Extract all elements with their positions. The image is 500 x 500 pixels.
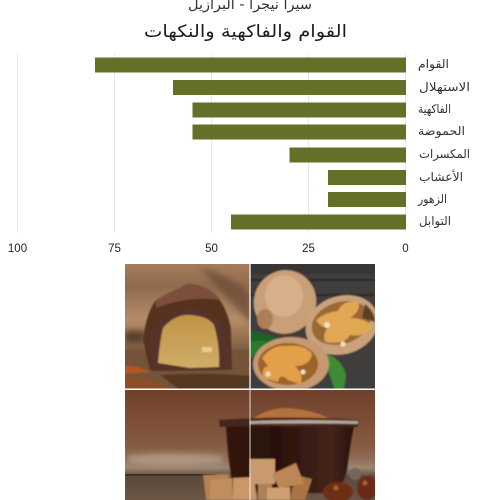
axis tick labels: 0 <box>402 243 409 255</box>
bar: fruit 55 <box>192 102 406 118</box>
bar: flowers 20 <box>328 192 406 207</box>
photo: walnuts <box>250 264 375 388</box>
photo: sugar bowl <box>120 388 380 500</box>
bar: herbs 20 <box>328 170 406 185</box>
category labels: الزهور <box>417 192 447 207</box>
category labels <box>417 57 470 229</box>
bar: nuts 30 <box>290 148 406 162</box>
category labels: التوابل <box>419 214 451 229</box>
icon: brown sugar dome <box>254 407 329 419</box>
icon: leaves <box>250 330 277 344</box>
icon: walnut half left <box>253 337 329 391</box>
bar chart <box>8 54 470 255</box>
photo collage <box>120 260 386 500</box>
category labels: الحموضة <box>418 124 465 139</box>
axis tick labels <box>8 243 409 255</box>
bar: consumption 60 <box>173 80 406 95</box>
axis tick labels: 25 <box>302 243 315 255</box>
category labels: الاستهلال <box>419 80 470 94</box>
axis tick labels: 75 <box>108 243 121 255</box>
axis tick labels: 50 <box>205 243 218 255</box>
icon: whole walnut <box>252 269 318 335</box>
category labels: القوام <box>418 57 449 72</box>
category labels: المكسرات <box>419 147 470 162</box>
category labels: الفاكهية <box>418 102 451 116</box>
bar: spices 45 <box>231 214 406 230</box>
icon: bowl <box>226 426 354 493</box>
icon: bowl handle <box>349 468 361 480</box>
bar: acidity 55 <box>192 124 406 140</box>
photo: chocolate praline <box>125 264 250 388</box>
axis tick labels: 100 <box>8 243 27 255</box>
icon: sugar cubes <box>203 474 232 500</box>
icon: rock sugar <box>323 482 353 500</box>
icon: walnut half right <box>304 294 375 356</box>
title: القوام والفاكهية والنكهات <box>144 22 347 42</box>
bar: texture 80 <box>95 58 406 72</box>
category labels: الأعشاب <box>419 169 463 184</box>
